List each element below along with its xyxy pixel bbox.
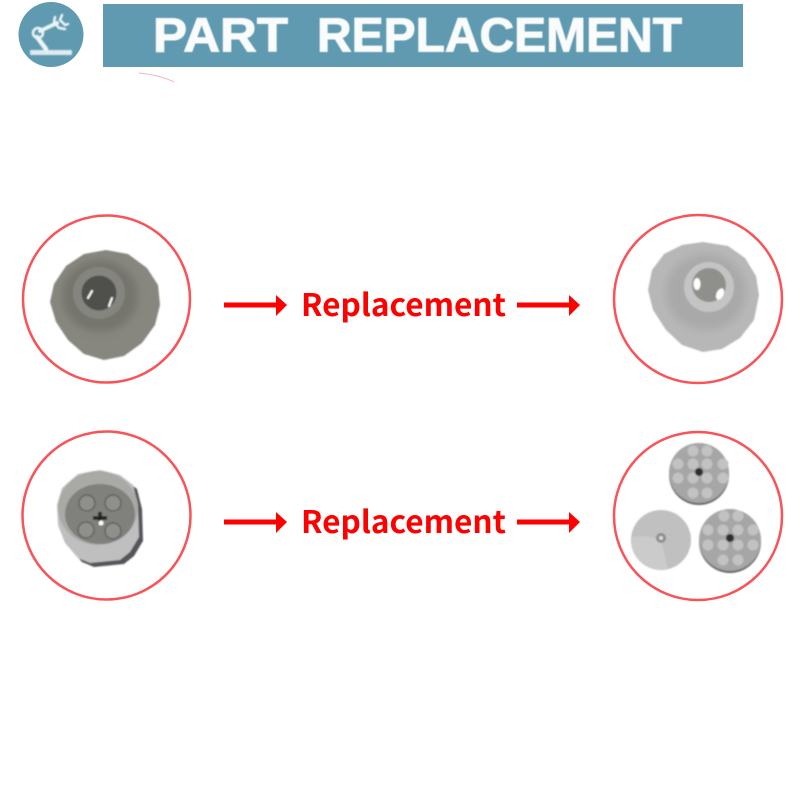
disc: smooth cone: [631, 510, 691, 570]
panel: bottom-right replacement discs: [614, 432, 782, 600]
panel: top-left worn dark part: [23, 216, 190, 382]
disc: top studded: [669, 443, 729, 505]
label: Replacement (bottom): Replacement: [301, 497, 506, 542]
part body: [50, 250, 160, 360]
arrow: top left: [224, 295, 287, 316]
title: [153, 10, 682, 62]
arrow: bottom right: [517, 512, 580, 533]
title banner: [103, 4, 743, 67]
part body: [648, 242, 759, 352]
label: Replacement (top): Replacement: [301, 280, 506, 325]
studs: [79, 495, 95, 511]
arrow: bottom left: [224, 512, 287, 533]
wheel: [57, 470, 143, 567]
disc: right studded: [699, 509, 761, 573]
decorative arc fragment: [139, 73, 174, 82]
panel: bottom-left worn wheel: [22, 432, 190, 600]
header icon: robot arm badge: [18, 2, 84, 67]
arrow: top right: [517, 295, 580, 316]
title: PART: [153, 10, 288, 62]
panel: top-right new light part: [614, 215, 782, 383]
title: REPLACEMENT: [317, 10, 682, 62]
